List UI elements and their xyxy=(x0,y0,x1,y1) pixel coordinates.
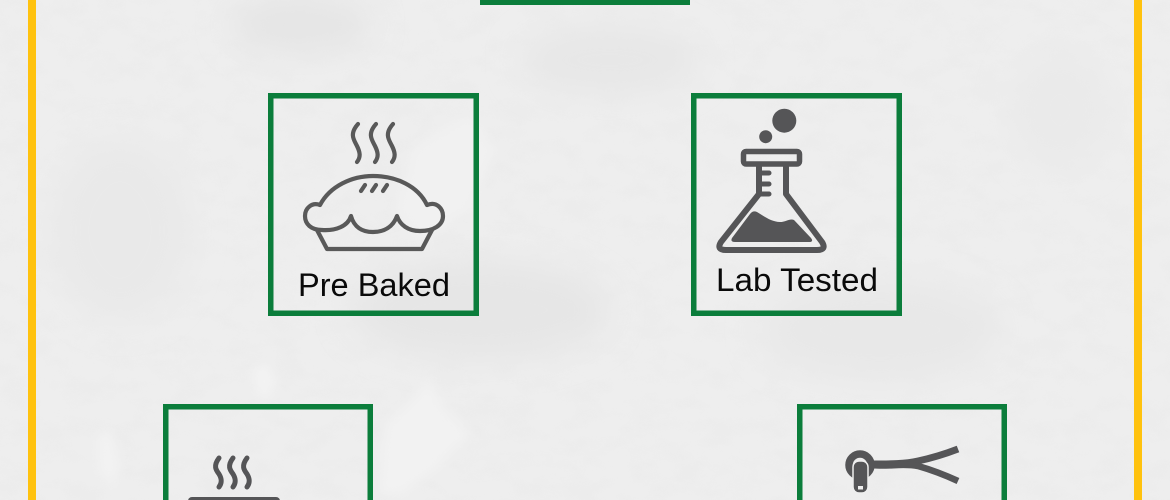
icon: lab flask xyxy=(719,109,824,250)
panel: Pre Baked xyxy=(271,96,476,313)
panel: lower left (cropped) xyxy=(166,407,370,500)
left yellow frame line xyxy=(28,0,36,500)
icon: steaming cup xyxy=(188,458,280,500)
icon: cable with zipper pull xyxy=(849,449,958,493)
label: Lab Tested: Lab Tested xyxy=(716,262,878,298)
icon: steaming pie xyxy=(305,124,443,249)
panel: lower right (cropped) xyxy=(800,407,1004,500)
right yellow frame line xyxy=(1134,0,1142,500)
top green box (cropped) xyxy=(480,0,690,5)
label: Pre Baked: Pre Baked xyxy=(298,267,450,303)
panel: Lab Tested xyxy=(694,96,899,313)
